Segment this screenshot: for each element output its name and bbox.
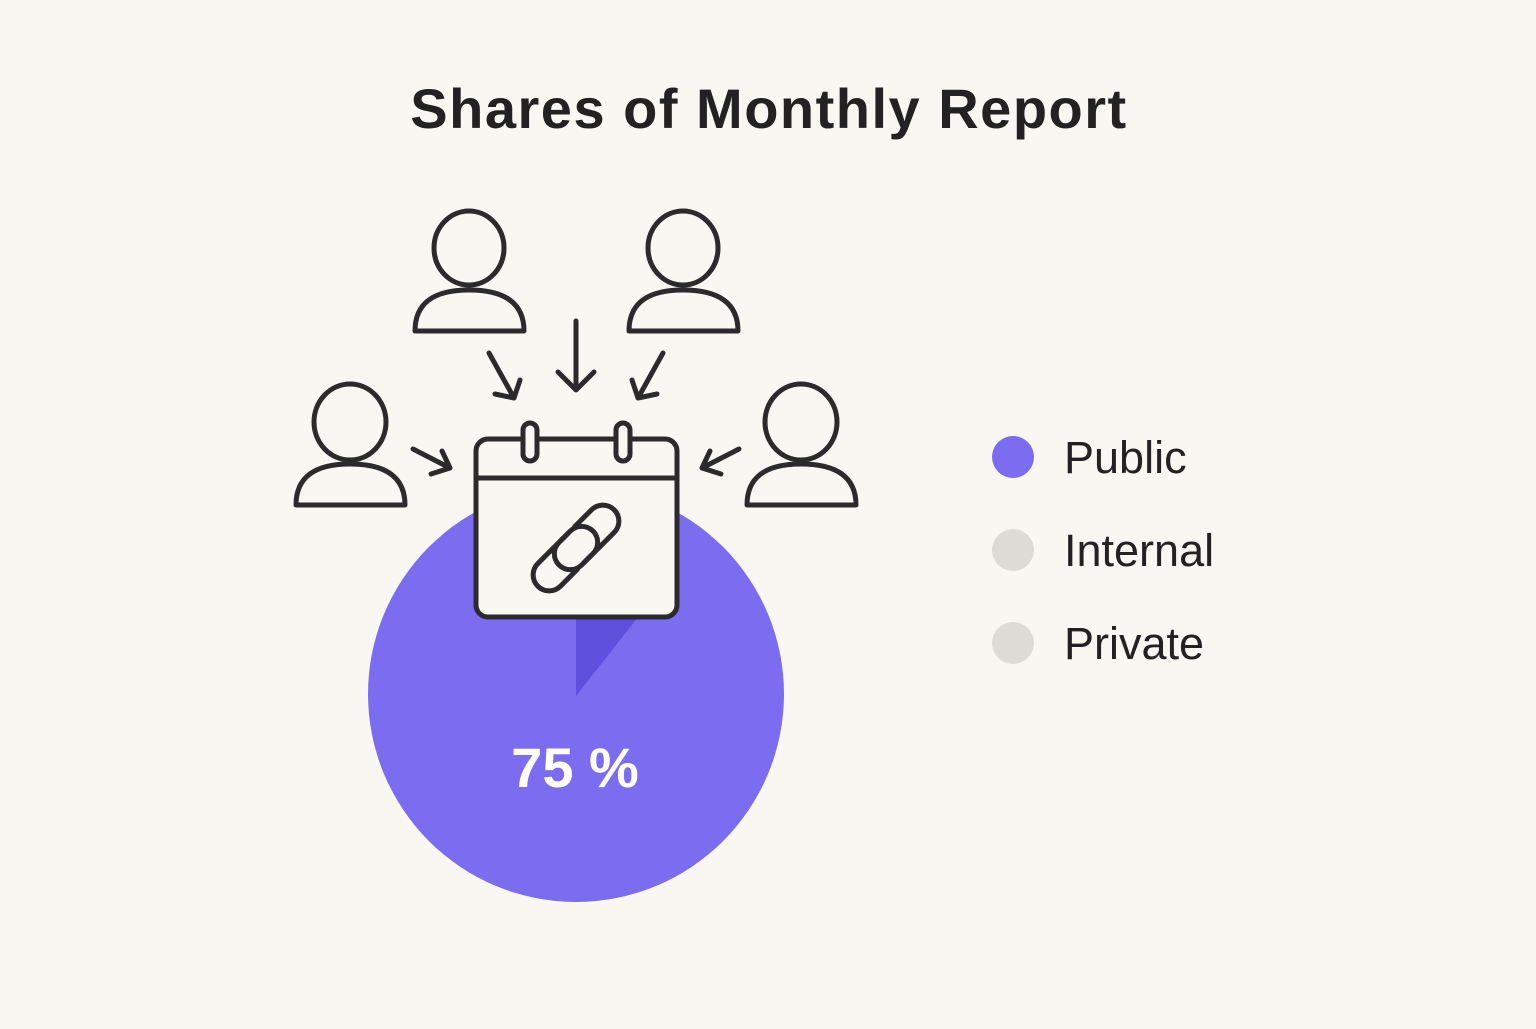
legend item: Public: Public: [1064, 432, 1187, 483]
icon: person left: [296, 384, 405, 505]
arrow: top-left: [489, 353, 520, 398]
pie chart: [368, 486, 784, 902]
percentage label: 75 %: [511, 736, 639, 799]
legend: [992, 432, 1214, 669]
legend item: Private: Private: [1064, 618, 1204, 669]
icon: person top-right: [629, 211, 738, 331]
arrow: top center: [558, 321, 594, 390]
title: Shares of Monthly Report: [410, 77, 1128, 140]
icon group: people sharing: [296, 211, 856, 617]
legend item: Public: [992, 432, 1187, 483]
legend item: Private: [992, 618, 1204, 669]
arrow: right: [702, 449, 739, 474]
icon: link chain: [527, 499, 625, 597]
arrow: left: [413, 449, 450, 474]
icon: calendar: [476, 423, 677, 617]
icon: person right: [747, 384, 856, 505]
arrow: top-right: [632, 353, 663, 398]
legend item: Internal: [992, 525, 1214, 576]
legend item: Internal: Internal: [1064, 525, 1214, 576]
icon: person top-left: [415, 211, 524, 331]
